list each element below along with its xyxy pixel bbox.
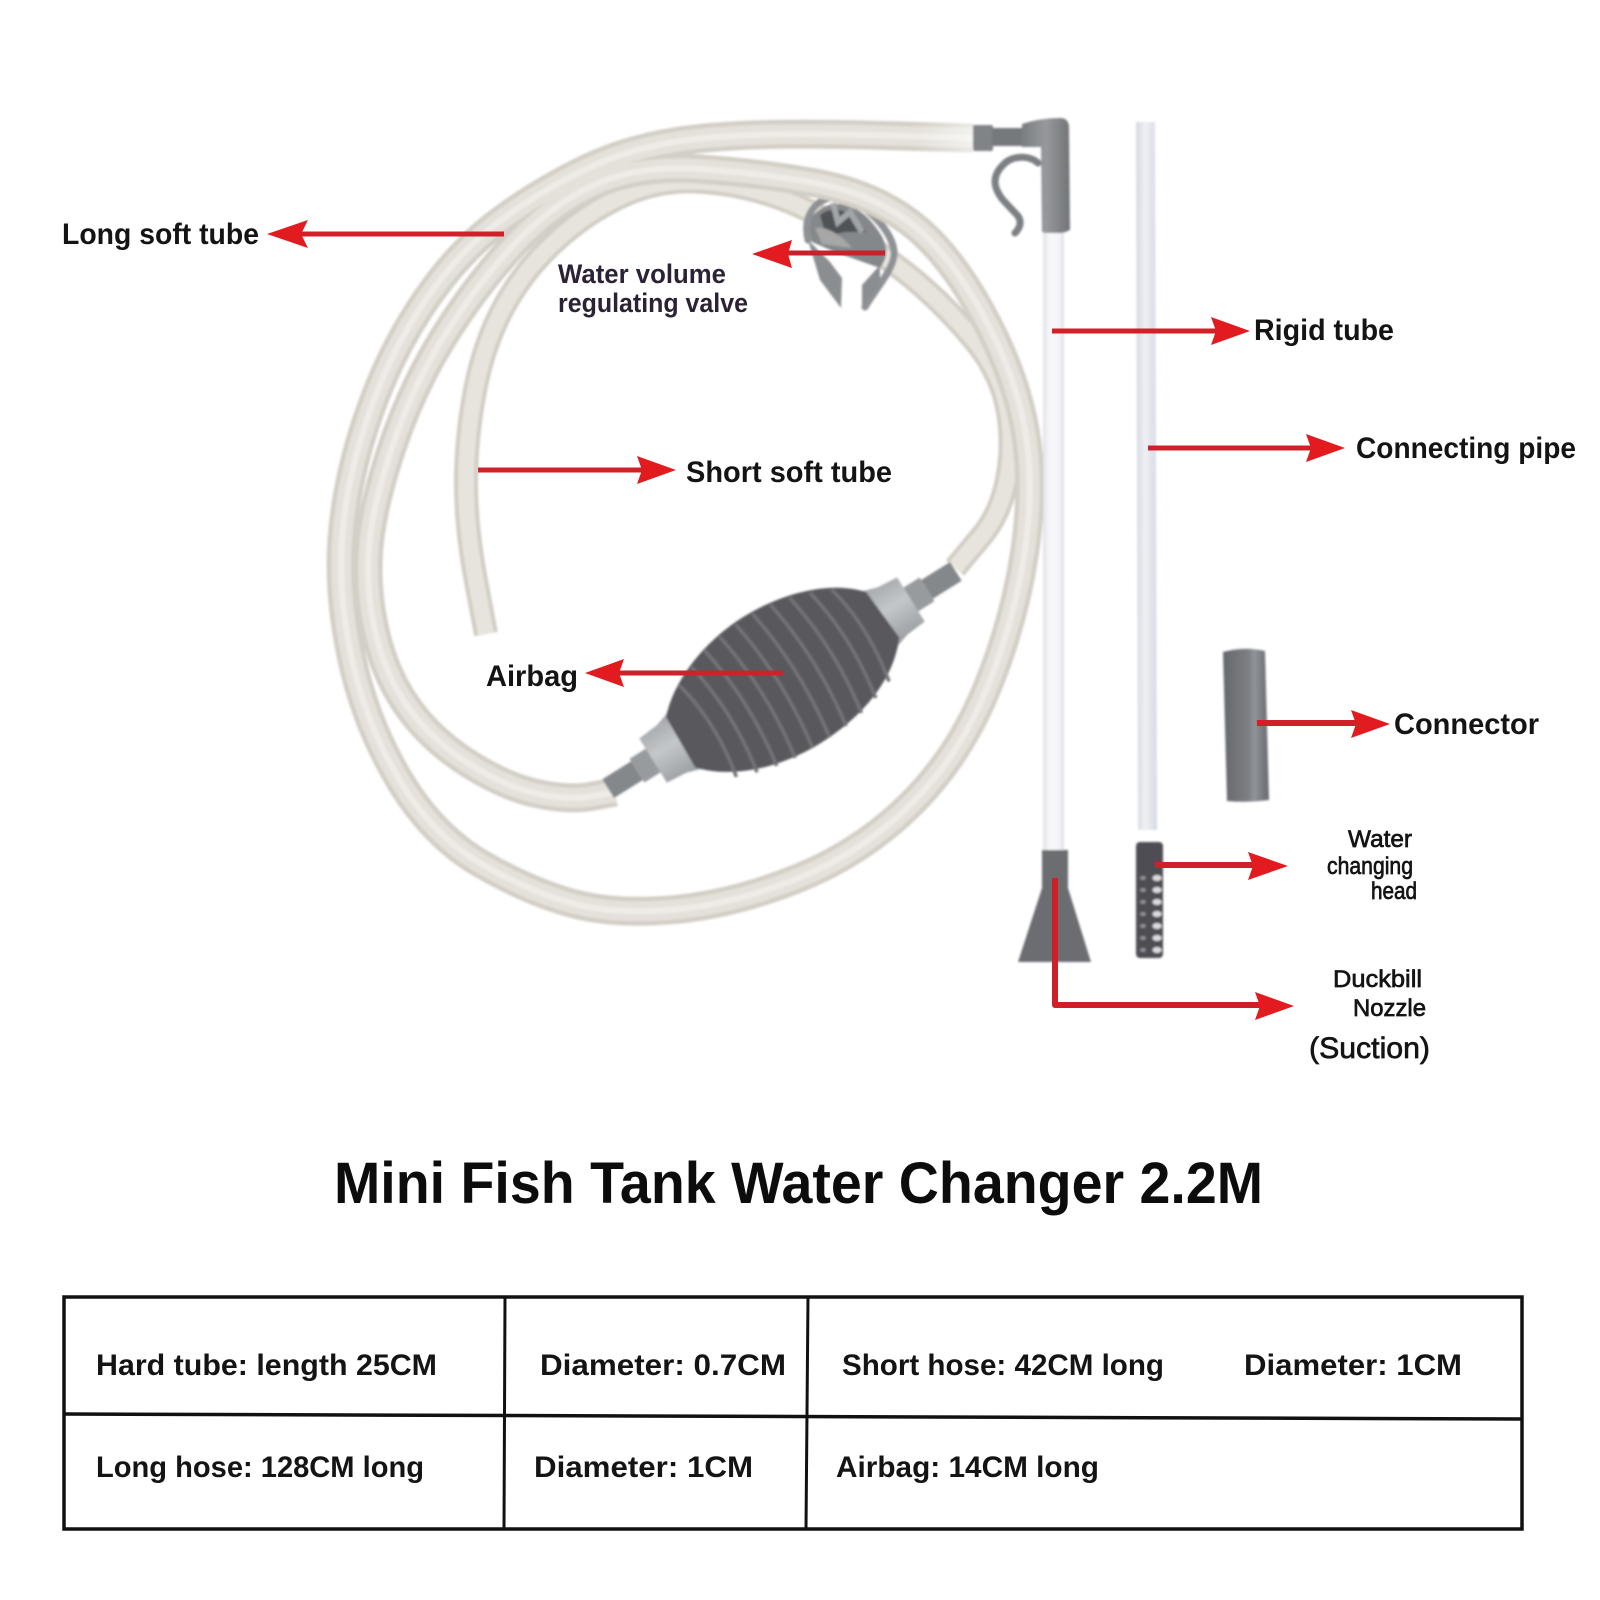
connector [1223,649,1269,802]
spec: short hose length: Short hose: 42CM long [842,1349,1164,1382]
long soft tube [341,120,1030,911]
label: water volume regulating valve: Water volume [558,259,726,289]
table grid [64,1297,1522,1529]
spec: hard tube length: Hard tube: length 25CM [96,1349,437,1382]
spec: short hose diameter: Diameter: 1CM [1244,1349,1462,1382]
label: duckbill nozzle suction: Duckbill [1333,966,1422,993]
label: airbag: Airbag [486,660,578,693]
label: water changing head: head [1371,878,1417,905]
arrow: duckbill nozzle [1055,878,1294,1020]
short soft tube [466,181,1011,634]
arrow: water volume regulating valve [752,240,885,268]
arrow: long soft tube [267,220,504,248]
label: water changing head [1327,826,1417,905]
bulb ribs [668,568,903,790]
specification table [64,1297,1522,1529]
rigid tube [1043,233,1064,853]
title: Mini Fish Tank Water Changer 2.2M [334,1151,1263,1216]
airbag bulb [569,509,995,851]
label: connector: Connector [1394,708,1539,741]
label: water volume regulating valve [558,259,748,318]
spec: hard tube diameter: Diameter: 0.7CM [540,1349,786,1382]
water volume regulating valve [807,197,894,308]
bulb collars [631,564,933,796]
product photo: siphon parts [341,118,1269,962]
label: rigid tube: Rigid tube [1254,314,1394,347]
duckbill nozzle [1018,850,1091,962]
bulb stubs [601,559,963,801]
connecting pipe [1136,122,1157,830]
spec: long hose length: Long hose: 128CM long [96,1451,424,1484]
bulb body [641,553,925,806]
spec: long hose diameter: Diameter: 1CM [534,1451,753,1484]
arrow: connector [1257,710,1390,738]
arrow: water changing head [1155,852,1288,880]
arrow: rigid tube [1052,317,1250,345]
elbow and hook [973,118,1070,234]
label: water changing head: Water [1348,826,1412,853]
arrow: short soft tube [478,456,676,484]
label: duckbill nozzle suction: Nozzle [1353,995,1426,1022]
spec: airbag length: Airbag: 14CM long [836,1451,1099,1484]
label: water volume regulating valve: regulating valve [558,288,748,318]
label: duckbill nozzle suction: (Suction) [1309,1032,1430,1065]
arrow: connecting pipe [1148,434,1345,462]
label: long soft tube: Long soft tube [62,218,259,251]
label: connecting pipe: Connecting pipe [1356,432,1576,465]
label: short soft tube: Short soft tube [686,456,892,489]
label: water changing head: changing [1327,853,1413,880]
water changing head [1136,842,1163,958]
arrow: airbag [585,659,783,687]
label: duckbill nozzle suction [1309,966,1430,1065]
